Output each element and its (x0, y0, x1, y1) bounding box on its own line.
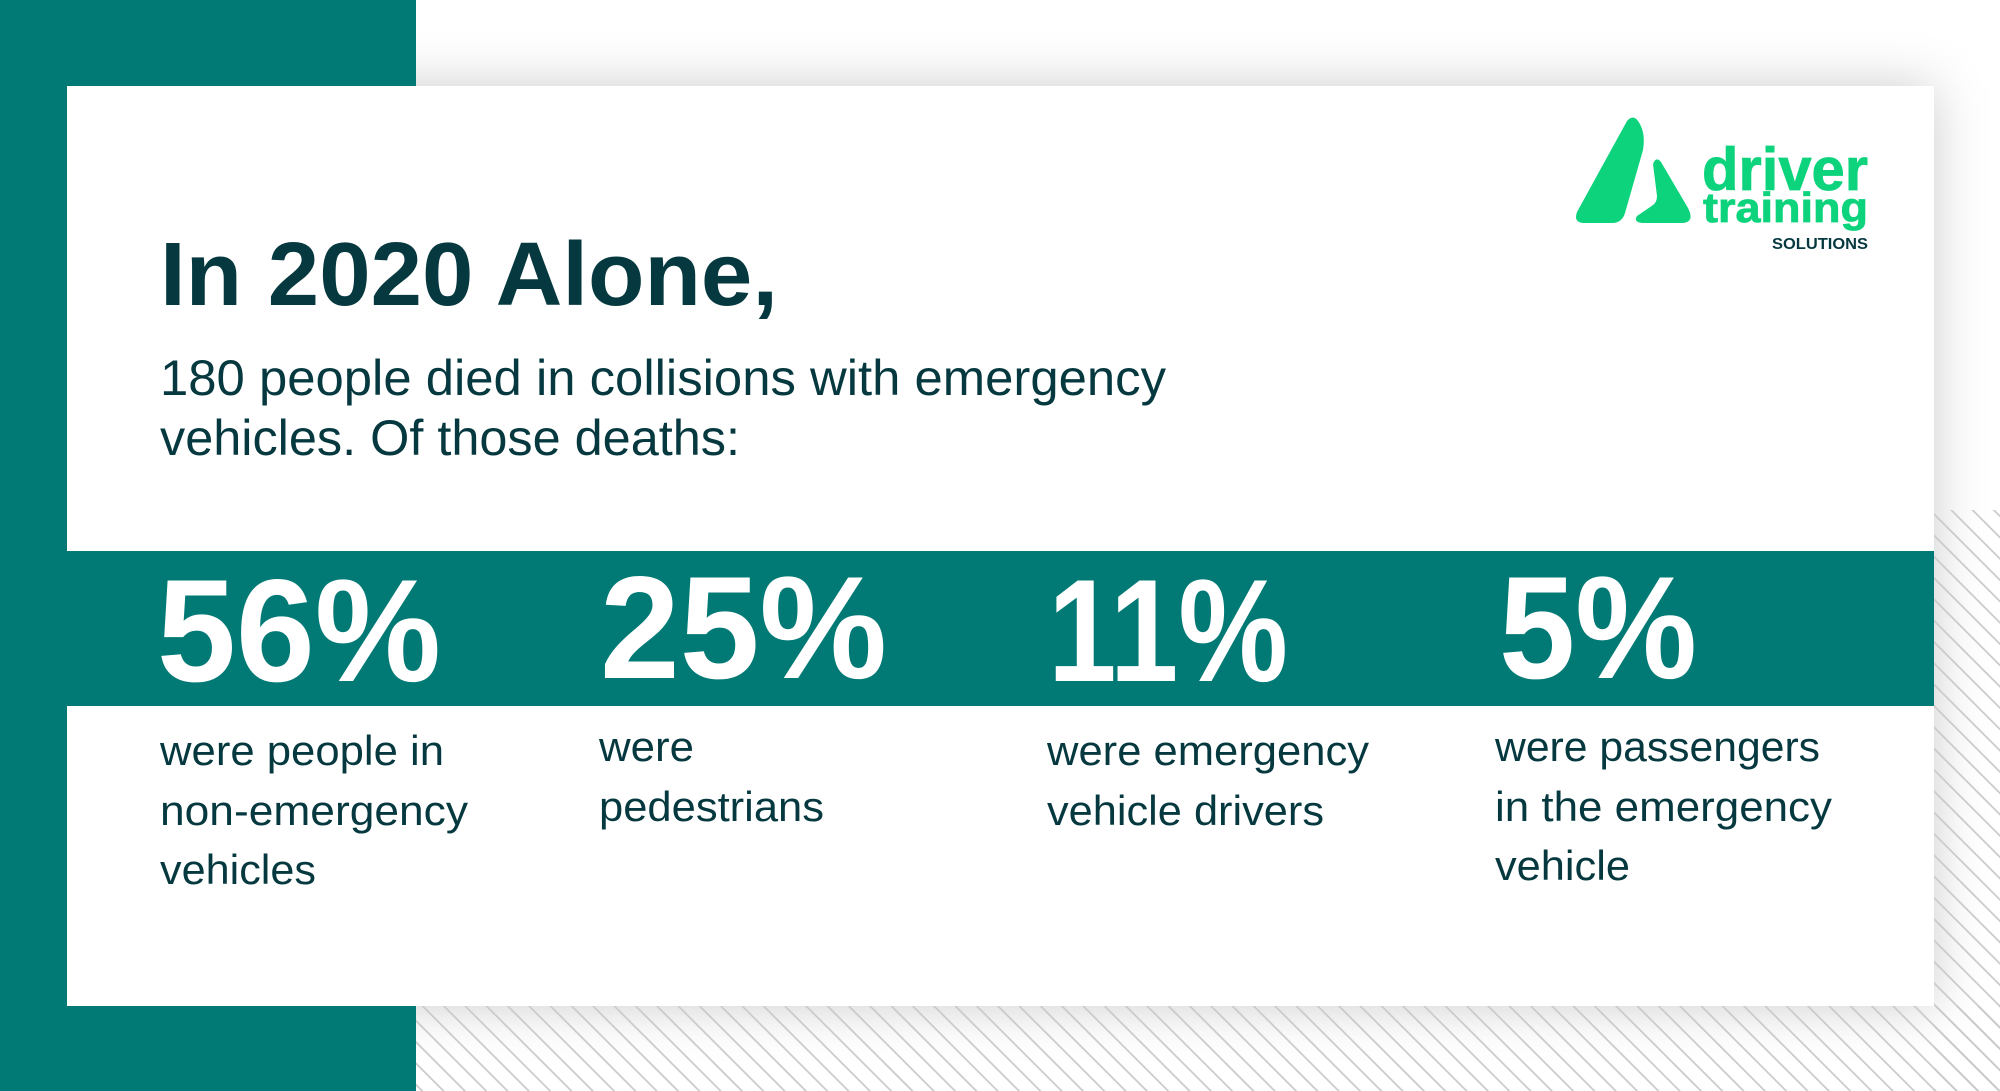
logo: driver training solutions: SOLUTIONS (1772, 236, 1868, 253)
stat: 5%: in the emergency (1495, 783, 1832, 830)
teal stat band (67, 551, 1934, 706)
stat: 25%: pedestrians (599, 783, 824, 830)
logo: driver training solutions (1576, 118, 1868, 253)
stat: 25% (598, 546, 887, 830)
logo wordmark: driver (1702, 136, 1868, 203)
stat: 11% (1046, 549, 1369, 834)
white card (67, 86, 1934, 1006)
stat: 5% (1494, 546, 1832, 889)
stat: 11%: 11% (1048, 549, 1288, 712)
stat: 25%: were (598, 723, 694, 770)
teal side panel (0, 0, 416, 1091)
stat: 25%: 25% (600, 546, 887, 709)
stat: 56%: were people in (159, 727, 444, 774)
stat: 5%: were passengers (1494, 723, 1820, 770)
intro text: vehicles. Of those deaths: (160, 410, 740, 466)
stat: 56%: 56% (157, 549, 441, 712)
intro text: 180 people died in collisions with emergency (160, 350, 1166, 406)
stat: 56% (157, 549, 468, 893)
logo mark (1576, 118, 1691, 223)
intro text (160, 350, 1166, 466)
card shadow (67, 86, 1934, 1006)
stat: 5%: 5% (1499, 546, 1697, 709)
stat: 11%: vehicle drivers (1047, 787, 1324, 834)
logo: driver training solutions: training (1703, 184, 1868, 231)
hatch pattern right (1934, 510, 2000, 1091)
stat: 56%: vehicles (160, 846, 316, 893)
heading: In 2020 Alone, (160, 225, 778, 325)
stat: 11%: were emergency (1046, 727, 1369, 774)
stat: 5%: vehicle (1495, 842, 1630, 889)
hatch pattern bottom (416, 1006, 2000, 1091)
stat: 56%: non-emergency (160, 787, 468, 834)
